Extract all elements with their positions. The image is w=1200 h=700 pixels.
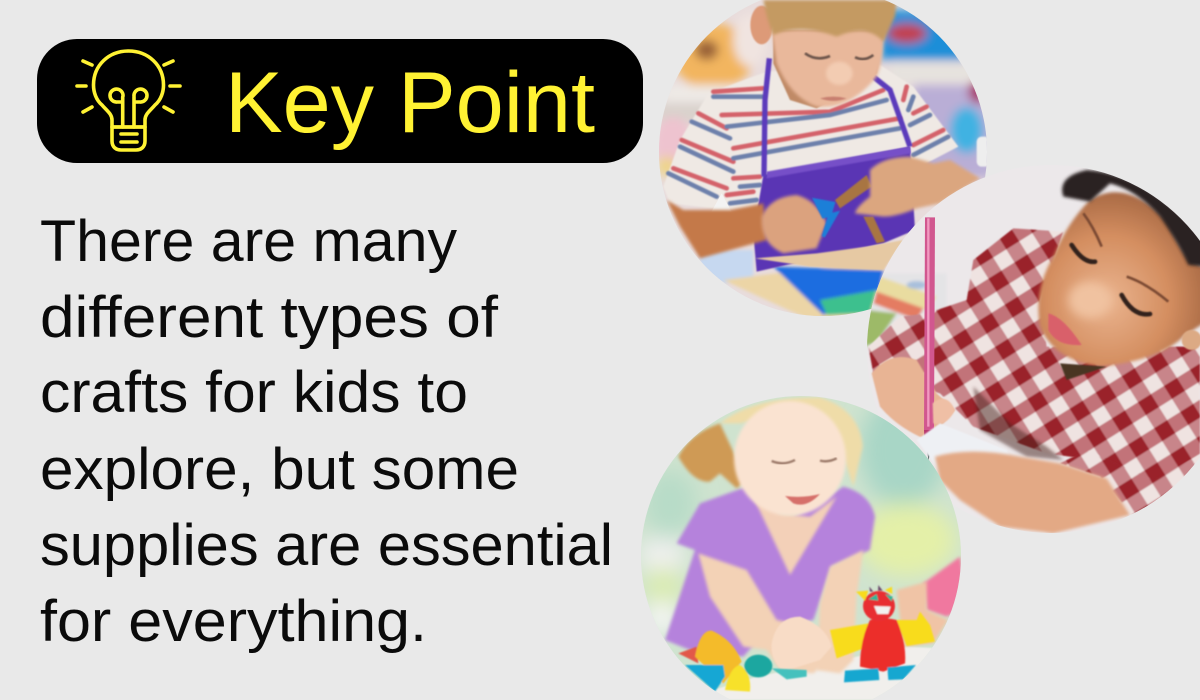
photo: child drawing with pink pencil	[860, 160, 1200, 540]
dress	[665, 487, 875, 657]
heading banner: Key Point	[37, 39, 643, 163]
body text block: for everything.	[40, 589, 427, 654]
icon: light bulb	[77, 51, 180, 150]
clay monster	[830, 585, 935, 682]
body text block: explore, but some	[40, 437, 519, 502]
eyes, brows and lips	[1072, 245, 1150, 314]
shirt	[663, 65, 958, 210]
apron	[753, 147, 915, 272]
body text block: crafts for kids to	[40, 360, 468, 425]
ear, neck and face	[750, 6, 773, 44]
bottom paper and table	[700, 250, 883, 320]
pink sleeve	[922, 556, 961, 618]
photo: boy cutting cardboard	[650, 0, 1000, 320]
neck shadow	[1060, 363, 1107, 380]
body text block: supplies are essential	[40, 513, 613, 578]
shirt with red check	[868, 228, 1200, 510]
clay lumps	[678, 631, 807, 692]
photo: girl with modelling clay	[640, 390, 970, 700]
hair	[720, 397, 863, 487]
table	[715, 646, 932, 700]
paper	[918, 422, 1007, 462]
right arm and hand	[855, 157, 980, 217]
hair	[763, 0, 897, 42]
white triangle	[712, 194, 730, 210]
cardboard piece	[835, 175, 885, 243]
left arm	[667, 200, 767, 258]
arms	[698, 553, 832, 673]
face	[734, 401, 846, 516]
heading text: Key Point	[225, 55, 595, 151]
body text block: different types of	[40, 285, 499, 350]
body text block	[40, 209, 613, 654]
hair	[1062, 170, 1200, 267]
forehead and face	[1038, 192, 1200, 367]
pencil	[924, 217, 935, 430]
scissors	[815, 200, 837, 237]
hand	[771, 617, 832, 672]
left hand	[872, 357, 955, 438]
lower hand and arm	[935, 452, 1130, 533]
cardboard sheet	[755, 240, 903, 270]
body text block: There are many	[40, 209, 457, 274]
finger over pencil	[933, 399, 955, 424]
